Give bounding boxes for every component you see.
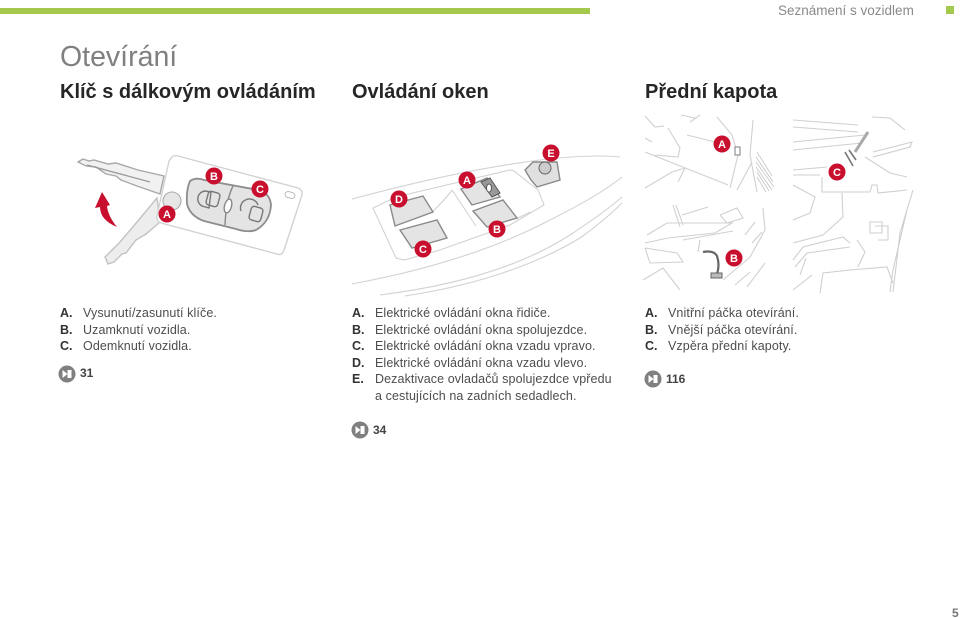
section label: Seznámení s vozidlem xyxy=(778,3,914,18)
text block: key legend xyxy=(60,306,217,353)
release button xyxy=(163,192,181,210)
text block: windows legend: Dezaktivace ovladačů spolujezdce vpředu xyxy=(375,372,612,386)
reference: page 31: 31 xyxy=(80,366,93,380)
red arrow xyxy=(95,192,117,227)
badge B xyxy=(206,168,222,184)
panel A lines xyxy=(645,115,757,192)
badge C xyxy=(252,180,268,198)
panel C lines xyxy=(793,117,913,293)
heading: windows: Ovládání oken xyxy=(352,81,489,103)
text block: hood legend xyxy=(645,306,799,353)
badge C xyxy=(414,240,432,258)
badge B: B xyxy=(210,171,218,183)
text block: hood legend: Vzpěra přední kapoty. xyxy=(668,339,791,353)
reference: page 34: 34 xyxy=(373,423,386,437)
badge A: A xyxy=(163,209,171,221)
panel C latch xyxy=(845,150,856,166)
badge C: C xyxy=(256,184,264,196)
panel A part xyxy=(735,147,740,155)
badge B: B xyxy=(730,253,738,265)
key blade down xyxy=(105,198,160,264)
badge A xyxy=(158,206,176,222)
heading: key: Klíč s dálkovým ovládáním xyxy=(60,81,316,103)
reference: page 31 xyxy=(58,366,93,382)
illustration: remote key xyxy=(76,155,303,265)
badge B: B xyxy=(493,224,501,236)
text block: windows legend: Elektrické ovládání okna řidiče. xyxy=(375,306,551,320)
reference: page 116: 116 xyxy=(666,372,685,386)
text block: hood legend: Vnější páčka otevírání. xyxy=(668,322,797,336)
panel A grille hatching xyxy=(756,152,774,192)
badge A: A xyxy=(718,139,726,151)
text block: windows legend: Elektrické ovládání okna vzadu vlevo. xyxy=(375,356,587,370)
buttons xyxy=(187,179,271,231)
illustration: window controls xyxy=(352,144,622,296)
text block: key legend: C. xyxy=(60,339,72,353)
text block: key legend: Odemknutí vozidla. xyxy=(83,339,192,353)
text block: windows legend xyxy=(352,306,612,402)
text block: windows legend: E. xyxy=(352,372,364,386)
lock switch xyxy=(481,178,500,197)
badge C: C xyxy=(419,244,427,256)
panel B lever xyxy=(703,252,718,274)
badge C xyxy=(828,164,846,180)
text block: key legend: Vysunutí/zasunutí klíče. xyxy=(83,306,217,320)
title: Otevírání xyxy=(60,41,177,73)
text block: hood legend: C. xyxy=(645,339,658,353)
text block: key legend: B. xyxy=(60,322,72,336)
deactivation switch xyxy=(525,162,560,187)
reference: page 34 xyxy=(352,422,386,438)
badge E: E xyxy=(547,148,555,160)
text block: key legend: Uzamknutí vozidla. xyxy=(83,322,190,336)
switches xyxy=(390,178,517,248)
text block: windows legend: A. xyxy=(352,306,364,320)
fob body xyxy=(157,156,302,254)
text block: hood legend: A. xyxy=(645,306,658,320)
reference: page 116 xyxy=(644,370,685,388)
badge E xyxy=(542,144,560,162)
text block: key legend: A. xyxy=(60,306,72,320)
door contour lines xyxy=(352,156,622,296)
text block: hood legend: B. xyxy=(645,322,658,336)
text block: windows legend: C. xyxy=(352,339,364,353)
key ring hole xyxy=(284,191,296,199)
badge B xyxy=(488,220,506,238)
badge B xyxy=(726,250,742,266)
badge A: A xyxy=(463,175,471,187)
text block: windows legend: D. xyxy=(352,356,364,370)
text block: windows legend: Elektrické ovládání okna spolujezdce. xyxy=(375,322,587,336)
badge A xyxy=(458,172,476,188)
badge D: D xyxy=(395,194,403,206)
badge A xyxy=(714,136,730,152)
text block: windows legend: B. xyxy=(352,322,364,336)
key blade up xyxy=(78,159,164,194)
badge D xyxy=(390,190,408,208)
green square marker xyxy=(946,6,954,14)
lock icons xyxy=(198,191,264,222)
heading: hood: Přední kapota xyxy=(645,81,777,103)
panel B lines xyxy=(643,205,765,290)
text block: windows legend: a cestujících na zadních sedadlech. xyxy=(375,388,577,402)
lever handle xyxy=(711,273,722,278)
text block: windows legend: Elektrické ovládání okna vzadu vpravo. xyxy=(375,339,596,353)
badge C: C xyxy=(833,167,841,179)
top green bar xyxy=(0,8,590,14)
panel C strut xyxy=(855,132,868,152)
text block: hood legend: Vnitřní páčka otevírání. xyxy=(668,306,799,320)
illustration: hood release xyxy=(642,114,914,293)
